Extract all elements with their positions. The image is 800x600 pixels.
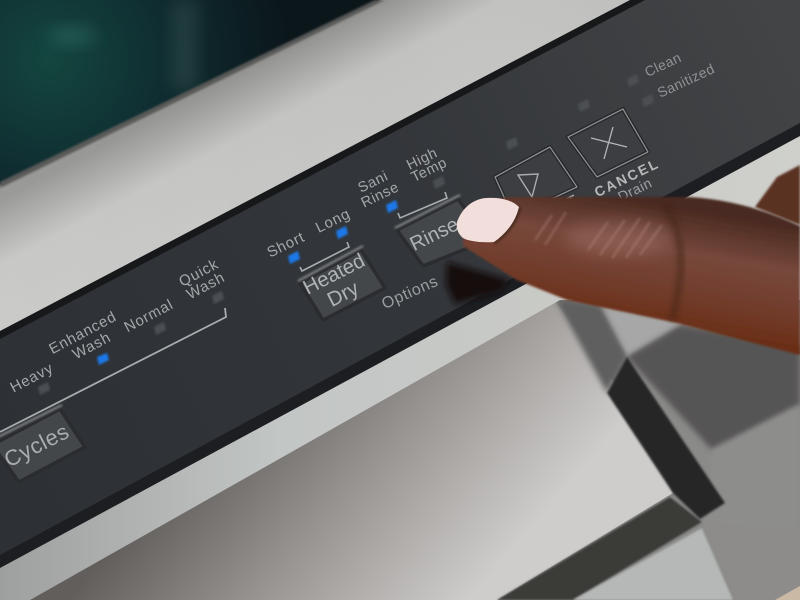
cancel drain labels: Drain — [615, 174, 654, 205]
cycles labels: Wash — [184, 269, 228, 303]
lower door stainless surface — [0, 298, 673, 600]
pointing finger — [457, 197, 800, 355]
upper stainless strip — [0, 0, 660, 345]
blue indicator lights — [97, 200, 398, 365]
button: heated dry — [298, 246, 385, 320]
skin creases — [535, 212, 662, 258]
cycles labels — [7, 256, 228, 396]
button: rinse: Rinse — [407, 214, 462, 256]
button: cycles: Cycles — [0, 418, 73, 472]
status labels: Clean — [642, 49, 684, 80]
rinse labels: Temp — [409, 155, 450, 186]
nail — [457, 198, 519, 242]
button: heated dry: Heated — [299, 249, 369, 299]
rinse labels: Sani — [356, 168, 391, 196]
handle and recess on right — [480, 290, 800, 600]
cancel drain labels: CANCEL — [592, 155, 662, 200]
cycles labels: Wash — [70, 329, 114, 363]
status labels: Sanitized — [655, 60, 717, 101]
heated dry labels — [264, 205, 353, 261]
dark teal window background — [0, 0, 420, 200]
panel bottom edge — [0, 123, 800, 568]
button: cycles — [0, 405, 85, 482]
rinse labels — [356, 145, 450, 211]
button: cancel with x — [568, 109, 648, 177]
heated dry labels: Long — [313, 205, 353, 237]
heated dry labels: Short — [264, 229, 308, 261]
cycles labels: Enhanced — [46, 308, 120, 358]
cycles bracket line — [0, 308, 226, 432]
stainless strip under panel — [0, 133, 800, 600]
second finger — [755, 165, 800, 225]
knuckle crease — [664, 205, 681, 320]
cycles labels: Heavy — [7, 360, 56, 396]
button: start with play triangle — [495, 147, 580, 217]
rinse bracket line — [398, 192, 447, 218]
rinse labels: Rinse — [359, 179, 402, 211]
finger shadow on panel — [446, 262, 510, 304]
rinse labels: High — [404, 145, 440, 174]
skin highlights — [565, 220, 675, 256]
button: rinse — [395, 195, 488, 266]
nail bed shadow — [494, 207, 519, 242]
shadows around handle recess — [497, 298, 800, 600]
status labels — [642, 49, 717, 101]
button: start with play triangle: T — [564, 191, 580, 210]
heated dry bracket line — [300, 242, 349, 271]
cycles labels: Quick — [176, 256, 222, 290]
options label: Options — [379, 273, 441, 313]
button: heated dry: Dry — [324, 276, 363, 312]
dim indicator lights — [38, 74, 654, 395]
panel top edge — [0, 0, 645, 339]
cycles labels: Normal — [121, 296, 176, 336]
